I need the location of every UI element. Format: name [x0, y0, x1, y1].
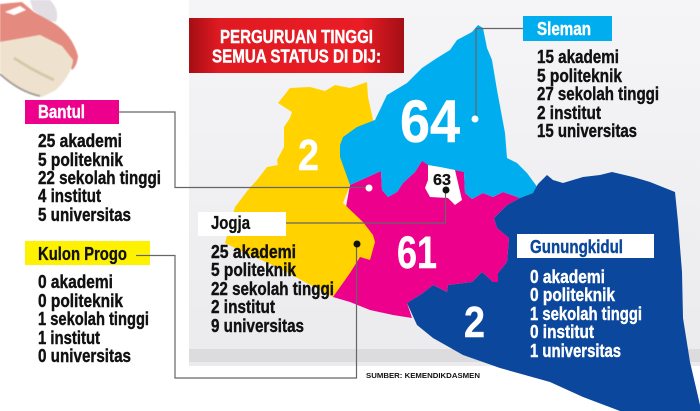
map total: Sleman 64: 64	[400, 88, 461, 155]
map: cyan Sleman region	[340, 25, 538, 199]
connector: Bantul	[119, 112, 372, 192]
list: Bantul counts: 5 politeknik	[38, 150, 124, 170]
background panel	[189, 0, 700, 366]
list: Gunungkidul counts: 1 sekolah tinggi	[530, 304, 642, 324]
panel: Kulon Progo	[25, 241, 150, 366]
shoe photo	[0, 0, 78, 97]
label: Bantul: Bantul	[38, 102, 85, 122]
list: Jogja counts: 22 sekolah tinggi	[211, 279, 334, 299]
title banner: PERGURUAN TINGGI	[220, 27, 373, 47]
list: Gunungkidul counts	[530, 267, 642, 361]
list: Kulon Progo counts: 0 politeknik	[38, 291, 124, 311]
list: Bantul counts: 5 universitas	[38, 205, 131, 225]
list: Jogja counts	[211, 242, 334, 336]
map total: Gunungkidul 2: 2	[464, 298, 485, 347]
list: Kulon Progo counts: 1 sekolah tinggi	[38, 309, 149, 329]
map total: Bantul 61: 61	[397, 227, 437, 278]
panel: Sleman	[523, 16, 659, 141]
list: Bantul counts: 22 sekolah tinggi	[38, 168, 161, 188]
label: Kulon Progo: Kulon Progo	[38, 244, 127, 264]
list: Kulon Progo counts: 1 institut	[38, 328, 100, 348]
title banner: SEMUA STATUS DI DIJ:	[212, 46, 381, 66]
label: Jogja: Jogja	[211, 213, 251, 233]
list: Jogja counts: 9 universitas	[211, 316, 304, 336]
list: Jogja counts: 25 akademi	[211, 242, 296, 262]
list: Sleman counts: 15 akademi	[537, 47, 619, 67]
label: Gunungkidul: Gunungkidul	[530, 237, 623, 257]
list: Kulon Progo counts: 0 akademi	[38, 272, 113, 292]
list: Jogja counts: 2 institut	[211, 297, 275, 317]
list: Sleman counts: 27 sekolah tinggi	[537, 84, 659, 104]
source note: SUMBER: KEMENDIKDASMEN	[366, 371, 480, 380]
connector: Kulon Progo	[136, 240, 360, 378]
list: Sleman counts: 2 institut	[537, 103, 601, 123]
title banner	[189, 18, 404, 73]
label: Sleman: Sleman	[537, 19, 591, 39]
list: Gunungkidul counts: 0 akademi	[530, 267, 605, 287]
list: Bantul counts: 25 akademi	[38, 131, 122, 151]
list: Bantul counts: 4 institut	[38, 186, 101, 206]
panel: Jogja	[198, 212, 334, 336]
connector: Jogja	[286, 186, 450, 223]
list: Sleman counts	[537, 47, 659, 141]
map total: Kulon Progo 2: 2	[298, 131, 319, 180]
map: navy Gunungkidul region	[407, 172, 700, 411]
connector: Sleman	[472, 28, 523, 122]
list: Gunungkidul counts: 0 politeknik	[530, 285, 616, 305]
panel: Bantul	[25, 100, 161, 225]
list: Gunungkidul counts: 0 institut	[530, 322, 594, 342]
list: Jogja counts: 5 politeknik	[211, 260, 297, 280]
list: Bantul counts	[38, 131, 161, 225]
list: Kulon Progo counts: 0 universitas	[38, 346, 131, 366]
list: Gunungkidul counts: 1 universitas	[530, 341, 621, 361]
map total: Jogja 63: 63	[433, 172, 451, 189]
map: yellow Kulon Progo region	[225, 82, 380, 297]
panel: Gunungkidul	[517, 234, 654, 361]
map: pink Bantul region	[333, 161, 520, 318]
list: Sleman counts: 5 politeknik	[537, 66, 623, 86]
list: Sleman counts: 15 universitas	[537, 121, 637, 141]
list: Kulon Progo counts	[38, 272, 149, 366]
map: Jogja city white region	[425, 165, 462, 205]
